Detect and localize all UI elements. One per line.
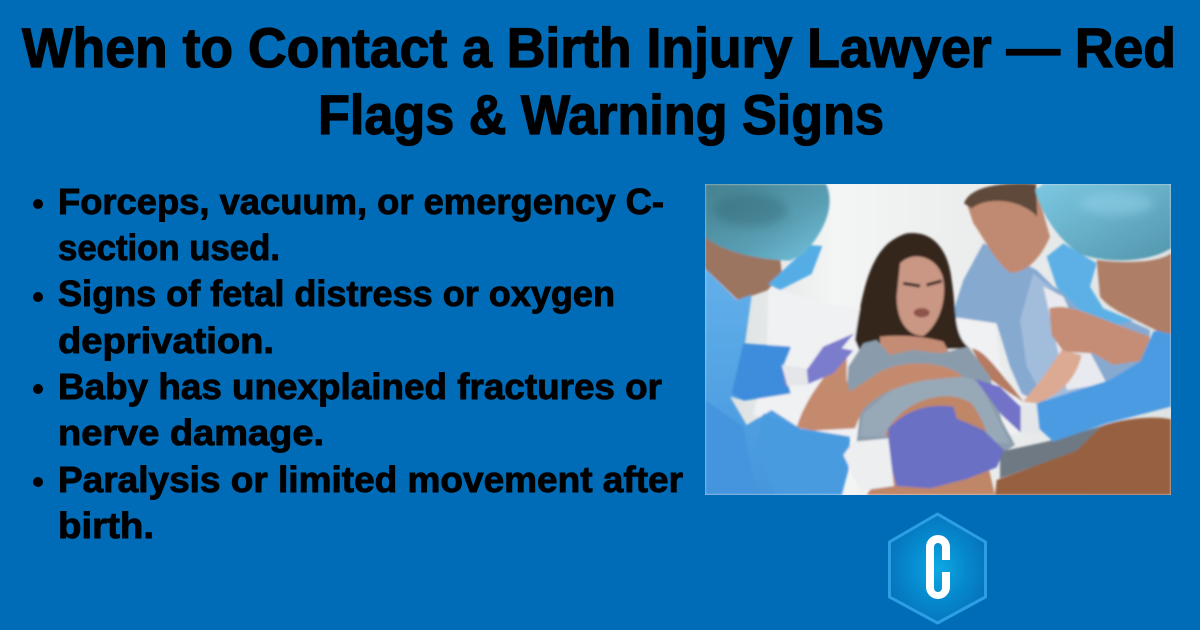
- left sleeve: [732, 343, 791, 401]
- woman's hair: [855, 233, 970, 352]
- glove on belly: [975, 379, 1021, 433]
- bullet: fetal distress: [33, 273, 615, 361]
- pillow and bed: [753, 287, 1020, 440]
- woman's face: [897, 256, 944, 336]
- cuff on shoulder: [782, 365, 808, 386]
- bullet: fractures: Baby has unexplained fractures or: [58, 366, 662, 407]
- title: When to Contact a Birth Injury Lawyer — Red: [22, 16, 1176, 79]
- left nurse's mask: [768, 245, 822, 290]
- logo letter: [926, 535, 950, 599]
- photo shading: [713, 192, 1153, 227]
- raised knee: [867, 396, 995, 495]
- right nurse's mask: [1047, 243, 1133, 324]
- right nurse's cap: [1035, 184, 1171, 260]
- bullet: paralysis: birth.: [58, 505, 154, 546]
- man's forearm and fist: [1049, 307, 1150, 365]
- bullet: forceps: [33, 181, 664, 268]
- foreground glove: [888, 406, 1004, 488]
- bullet: paralysis: [33, 459, 683, 546]
- left nurse's neck: [705, 223, 782, 301]
- bullet: fractures: [33, 366, 662, 453]
- woman's arm over belly: [797, 348, 963, 431]
- right nurse's sleeve: [1035, 327, 1171, 442]
- glove on shoulder: [782, 333, 854, 386]
- man's shirt: [952, 243, 1150, 405]
- right thigh: [995, 418, 1171, 495]
- photo: woman in labour with medical staff: [705, 184, 1171, 495]
- title: [21, 16, 1176, 146]
- dress: [847, 340, 1015, 455]
- bullet: forceps: section used.: [58, 227, 280, 268]
- bullet: fetal distress: deprivation.: [58, 320, 274, 361]
- bullet: fetal distress: Signs of fetal distress or oxygen: [58, 273, 615, 314]
- foreground cuff: [843, 438, 894, 491]
- man's undershirt: [1043, 287, 1107, 390]
- bullet: fractures: nerve damage.: [58, 412, 324, 453]
- left nurse's gown: [705, 268, 850, 495]
- grey skirt: [1000, 426, 1102, 478]
- title: Flags & Warning Signs: [318, 83, 884, 146]
- bullet list: [33, 181, 683, 546]
- bullet: forceps: Forceps, vacuum, or emergency C-: [58, 181, 664, 222]
- logo: hexagon C: [888, 512, 987, 624]
- man's head: [967, 186, 1050, 273]
- bullet: paralysis: Paralysis or limited movement after: [58, 459, 683, 500]
- left nurse's cap: [705, 184, 830, 261]
- woman's chest: [880, 336, 953, 370]
- right cuff: [1018, 404, 1040, 435]
- woman's raised arm: [1023, 350, 1082, 403]
- right nurse's face: [1097, 253, 1171, 334]
